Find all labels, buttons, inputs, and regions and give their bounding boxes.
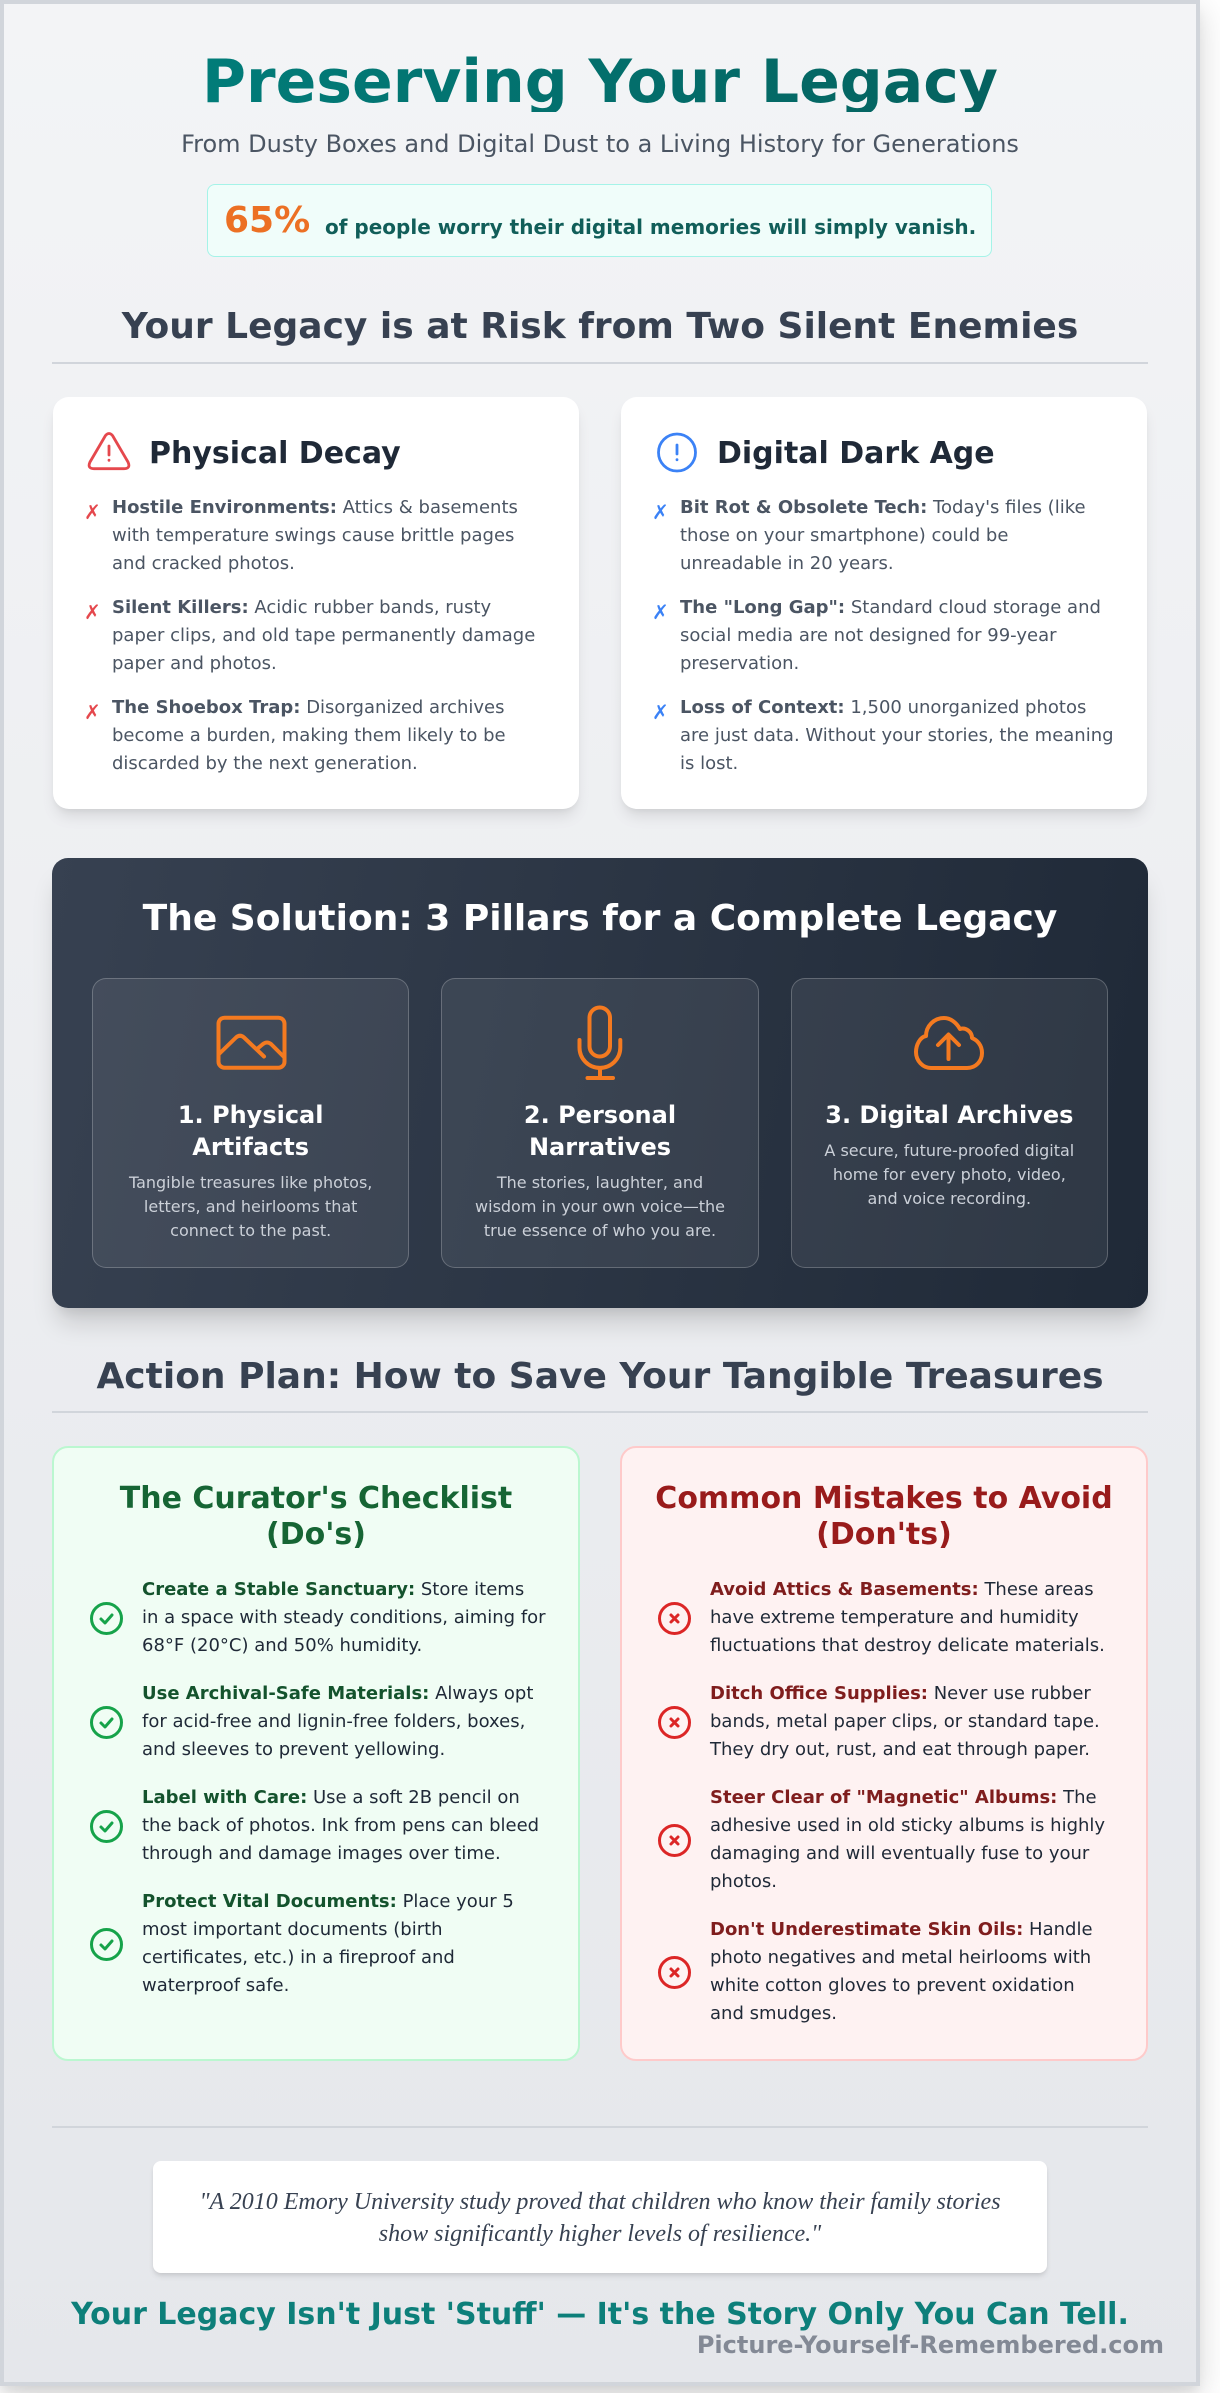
list item: bit rot: Bit Rot & Obsolete Tech: Today's files (like — [680, 497, 1086, 518]
item: label with care: Label with Care: Use a soft 2B pencil on — [142, 1787, 520, 1808]
closing statement: Your Legacy Isn't Just 'Stuff' — It's the Story Only You Can Tell. — [71, 2297, 1129, 2332]
item: archival-safe: for acid-free and lignin-free folders, boxes, — [142, 1711, 525, 1732]
item: label with care — [142, 1787, 539, 1864]
item: skin oils — [710, 1919, 1093, 2024]
stat number: 65% — [224, 200, 310, 241]
panel: solution — [52, 858, 1148, 1308]
list item: shoebox trap: discarded by the next generation. — [112, 753, 418, 774]
item: attics: fluctuations that destroy delicate materials. — [710, 1635, 1105, 1656]
website watermark: Picture-Yourself-Remembered.com — [697, 2331, 1164, 2359]
pillar 3 — [791, 978, 1108, 1268]
pillar description: The stories, laughter, and — [497, 1173, 703, 1192]
marker: ✗ — [84, 700, 101, 724]
list item: silent killers: paper clips, and old tape permanently damage — [112, 625, 535, 646]
section heading: risks: Your Legacy is at Risk from Two Silent Enemies — [122, 306, 1078, 347]
pillar 1 — [92, 978, 409, 1268]
quote box: show significantly higher levels of resilience." — [379, 2221, 821, 2247]
item: magnetic albums — [710, 1787, 1105, 1892]
list item: shoebox trap: The Shoebox Trap: Disorganized archives — [112, 697, 505, 718]
subtitle: From Dusty Boxes and Digital Dust to a Living History for Generations — [181, 130, 1019, 158]
item: vital documents: waterproof safe. — [142, 1975, 289, 1996]
item: stable sanctuary — [142, 1579, 546, 1656]
pillar description: Tangible treasures like photos, — [129, 1173, 372, 1192]
item: skin oils: and smudges. — [710, 2003, 837, 2024]
solution heading: The Solution: 3 Pillars for a Complete Legacy — [143, 898, 1057, 939]
pillar description — [128, 1173, 372, 1240]
panel: digital dark age — [621, 397, 1147, 809]
list item: bit rot: unreadable in 20 years. — [680, 553, 894, 574]
panel: do's — [52, 1446, 580, 2061]
icon: check — [90, 1706, 123, 1739]
item: magnetic albums: Steer Clear of "Magnetic" Albums: The — [710, 1787, 1097, 1808]
pillar description: letters, and heirlooms that — [144, 1197, 357, 1216]
list item: bit rot: those on your smartphone) could be — [680, 525, 1008, 546]
quote box: "A 2010 Emory University study proved that children who know their family stories — [199, 2189, 1001, 2215]
item: office supplies: They dry out, rust, and eat through paper. — [710, 1739, 1090, 1760]
icon: check — [90, 1928, 123, 1961]
icon: cloud upload — [914, 1016, 984, 1070]
item: label with care: through and damage images over time. — [142, 1843, 501, 1864]
list item: loss of context: are just data. Without your stories, the meaning — [680, 725, 1114, 746]
pillar 2 — [441, 978, 759, 1268]
item: stable sanctuary: 68°F (20°C) and 50% humidity. — [142, 1635, 422, 1656]
pillar title: 3. Digital Archives — [825, 1101, 1073, 1129]
item: magnetic albums: damaging and will eventually fuse to your — [710, 1843, 1089, 1864]
list item: bit rot — [680, 497, 1086, 574]
list item: long gap — [680, 597, 1101, 674]
item: attics: have extreme temperature and humidity — [710, 1607, 1079, 1628]
list item: loss of context: is lost. — [680, 753, 738, 774]
heading: don'ts — [655, 1481, 1113, 1552]
pillar title — [178, 1101, 323, 1161]
list item: loss of context: Loss of Context: 1,500 unorganized photos — [680, 697, 1086, 718]
pillar description: wisdom in your own voice—the — [475, 1197, 725, 1216]
list item: long gap: social media are not designed for 99-year — [680, 625, 1057, 646]
item: vital documents — [142, 1891, 514, 1996]
icon: microphone — [578, 1006, 622, 1080]
pillar title: Artifacts — [192, 1133, 309, 1161]
item: vital documents: Protect Vital Documents: Place your 5 — [142, 1891, 514, 1912]
marker: ✗ — [84, 500, 101, 524]
item: magnetic albums: photos. — [710, 1871, 777, 1892]
icon: image — [216, 1016, 286, 1070]
pillar title: 1. Physical — [178, 1101, 323, 1129]
pillar description: and voice recording. — [868, 1189, 1031, 1208]
marker: ✗ — [652, 500, 669, 524]
item: stable sanctuary: in a space with steady conditions, aiming for — [142, 1607, 546, 1628]
item: stable sanctuary: Create a Stable Sanctuary: Store items — [142, 1579, 524, 1600]
heading: digital dark age: Digital Dark Age — [717, 436, 995, 471]
icon: warning triangle — [88, 432, 130, 470]
pillar description — [824, 1141, 1074, 1208]
list item: silent killers: Silent Killers: Acidic rubber bands, rusty — [112, 597, 491, 618]
pillar description: true essence of who you are. — [484, 1221, 716, 1240]
icon: cross — [658, 1706, 691, 1739]
icon: check — [90, 1810, 123, 1843]
panel: physical decay — [53, 397, 579, 809]
item: vital documents: certificates, etc.) in a fireproof and — [142, 1947, 455, 1968]
pillar description: home for every photo, video, — [833, 1165, 1066, 1184]
icon: cross — [658, 1956, 691, 1989]
item: vital documents: most important documents (birth — [142, 1919, 443, 1940]
pillar description: A secure, future-proofed digital — [824, 1141, 1074, 1160]
item: magnetic albums: adhesive used in old sticky albums is highly — [710, 1815, 1105, 1836]
heading: physical decay: Physical Decay — [149, 436, 401, 471]
list item: hostile environments: Hostile Environments: Attics & basements — [112, 497, 518, 518]
marker: ✗ — [652, 700, 669, 724]
icon: cross — [658, 1824, 691, 1857]
list item: shoebox trap — [112, 697, 506, 774]
item: office supplies: Ditch Office Supplies: Never use rubber — [710, 1683, 1091, 1704]
marker: ✗ — [652, 600, 669, 624]
stat callout — [207, 184, 992, 257]
pillar title — [524, 1101, 676, 1161]
heading: don'ts: Common Mistakes to Avoid — [655, 1481, 1113, 1516]
item: office supplies — [710, 1683, 1100, 1760]
list item: shoebox trap: become a burden, making them likely to be — [112, 725, 506, 746]
item: archival-safe: and sleeves to prevent yellowing. — [142, 1739, 445, 1760]
list item: hostile environments: and cracked photos. — [112, 553, 295, 574]
list item: hostile environments: with temperature swings cause brittle pages — [112, 525, 514, 546]
pillar title: Narratives — [529, 1133, 671, 1161]
list item: hostile environments — [112, 497, 518, 574]
marker: ✗ — [84, 600, 101, 624]
section heading: action plan: Action Plan: How to Save Your Tangible Treasures — [96, 1356, 1104, 1397]
icon: alert circle — [657, 432, 697, 472]
list item: silent killers: paper and photos. — [112, 653, 277, 674]
item: label with care: the back of photos. Ink from pens can bleed — [142, 1815, 539, 1836]
panel: don'ts — [620, 1446, 1148, 2061]
quote box — [153, 2161, 1047, 2273]
pillar description — [475, 1173, 725, 1240]
item: attics: Avoid Attics & Basements: These areas — [710, 1579, 1094, 1600]
icon: check — [90, 1602, 123, 1635]
item: skin oils: photo negatives and metal heirlooms with — [710, 1947, 1091, 1968]
item: office supplies: bands, metal paper clips, or standard tape. — [710, 1711, 1100, 1732]
item: attics — [710, 1579, 1105, 1656]
pillar title: 2. Personal — [524, 1101, 676, 1129]
item: archival-safe — [142, 1683, 533, 1760]
list item: long gap: preservation. — [680, 653, 799, 674]
heading: don'ts: (Don'ts) — [816, 1517, 952, 1552]
heading: do's — [120, 1481, 512, 1552]
heading: do's: The Curator's Checklist — [120, 1481, 512, 1516]
stat text: of people worry their digital memories will simply vanish. — [325, 215, 976, 239]
pillar description: connect to the past. — [170, 1221, 331, 1240]
icon: cross — [658, 1602, 691, 1635]
item: archival-safe: Use Archival-Safe Materials: Always opt — [142, 1683, 533, 1704]
list item: long gap: The "Long Gap": Standard cloud storage and — [680, 597, 1101, 618]
list item: loss of context — [680, 697, 1114, 774]
item: skin oils: white cotton gloves to prevent oxidation — [710, 1975, 1075, 1996]
item: skin oils: Don't Underestimate Skin Oils: Handle — [710, 1919, 1093, 1940]
list item: silent killers — [112, 597, 535, 674]
heading: do's: (Do's) — [266, 1517, 366, 1552]
